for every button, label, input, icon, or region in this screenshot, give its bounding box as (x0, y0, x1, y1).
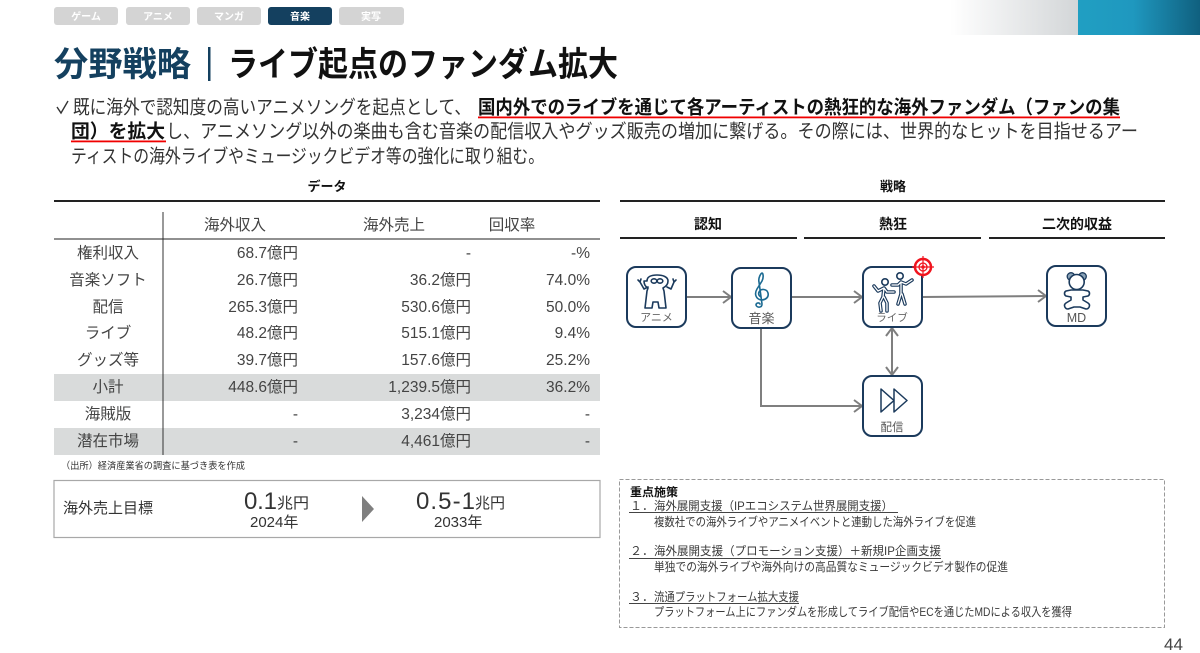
heading: strategy: 戦略 (880, 179, 906, 194)
data table: 海外収入 (204, 216, 266, 234)
header gradient band (950, 0, 1200, 35)
summary text: 団）を拡大 (71, 120, 165, 142)
data table: - (293, 406, 298, 423)
data table: 権利収入 (77, 244, 139, 262)
overseas sales target box: 0.5-1 (416, 488, 475, 515)
data table: 39.7億円 (237, 351, 298, 369)
data table: - (585, 406, 590, 423)
node: music (732, 268, 791, 328)
category tabs: マンガ (214, 10, 244, 23)
panel: key measures: 海外展開支援（IPエコシステム世界展開支援） (654, 499, 893, 513)
category tabs (54, 7, 404, 25)
summary text (57, 96, 1138, 168)
overseas sales target box: 2033年 (434, 514, 482, 531)
data table: 配信 (92, 298, 124, 316)
title (54, 45, 618, 84)
phase headings (620, 216, 1165, 239)
data table: 海賊版 (85, 405, 132, 423)
category tabs: ゲーム (71, 10, 101, 23)
node: music: 音楽 (748, 311, 775, 326)
node: live: ライブ (876, 311, 908, 324)
data table: 海外売上 (363, 216, 425, 234)
node: live (863, 267, 922, 327)
data table: - (293, 433, 298, 450)
node: anime: アニメ (640, 312, 673, 324)
phase headings: 認知 (694, 216, 722, 232)
data table: 音楽ソフト (69, 271, 147, 289)
phase headings: 熱狂 (879, 216, 907, 232)
summary text: ティストの海外ライブやミュージックビデオ等の強化に取り組む。 (71, 144, 544, 168)
data table (54, 212, 600, 455)
data table: グッズ等 (77, 351, 139, 369)
category tabs: アニメ (143, 11, 173, 23)
source note: （出所）経済産業省の調査に基づき表を作成 (61, 460, 245, 472)
overseas sales target box: 海外売上目標 (63, 500, 153, 517)
panel: key measures: プラットフォーム上にファンダムを形成してライブ配信やECを通じたMDによる収入を獲得 (654, 604, 1072, 619)
data table: 回収率 (489, 216, 535, 234)
panel: key measures: ２． (630, 544, 654, 558)
node: merchandise: MD (1067, 311, 1086, 325)
data table: 48.2億円 (237, 324, 298, 342)
heading: data: データ (307, 179, 347, 194)
data table: -% (571, 245, 590, 262)
flow arrows (686, 290, 1046, 412)
data table: 448.6億円 (228, 378, 298, 396)
title: 分野戦略 (54, 46, 191, 84)
overseas sales target box: 2024年 (250, 514, 298, 531)
title: ライブ起点のファンダム拡大 (228, 45, 618, 84)
phase headings: 二次的収益 (1042, 216, 1112, 232)
category tabs: 実写 (361, 10, 381, 23)
data table: 25.2% (546, 352, 590, 369)
data table: 157.6億円 (401, 351, 471, 369)
panel: key measures: 流通プラットフォーム拡大支援 (654, 590, 799, 604)
data table: 4,461億円 (401, 432, 471, 450)
data table: 26.7億円 (237, 271, 298, 289)
panel: key measures: １． (630, 499, 654, 513)
data table: 潜在市場 (77, 432, 139, 450)
node: distribution: 配信 (880, 420, 904, 434)
summary text: 国内外でのライブを通じて各アーティストの熱狂的な海外ファンダム（ファンの集 (478, 96, 1120, 118)
overseas sales target box: 0.1 (244, 488, 277, 515)
data table: 68.7億円 (237, 244, 298, 262)
panel: key measures (620, 480, 1164, 628)
data table: 265.3億円 (228, 298, 298, 316)
data table: 1,239.5億円 (388, 378, 471, 396)
data table: 530.6億円 (401, 298, 471, 316)
panel: key measures: 海外展開支援（プロモーション支援）＋新規IP企画支援 (654, 543, 941, 558)
icon: target marker (912, 256, 934, 278)
panel: key measures: 複数社での海外ライブやアニメイベントと連動した海外ライブを促進 (654, 514, 976, 529)
panel: key measures: 重点施策 (630, 485, 679, 499)
panel: key measures: 単独での海外ライブや海外向けの高品質なミュージックビデオ製作の促進 (654, 559, 1008, 574)
node: merchandise (1047, 266, 1106, 326)
overseas sales target box: 兆円 (277, 495, 309, 512)
data table: - (466, 245, 471, 262)
category tabs: 音楽 (290, 10, 310, 23)
data table: 9.4% (555, 325, 590, 342)
summary text: 既に海外で認知度の高いアニメソングを起点として、 (73, 96, 471, 118)
data table: 36.2億円 (410, 271, 471, 289)
data table: 74.0% (546, 272, 590, 289)
data table: 36.2% (546, 379, 590, 396)
data table: 50.0% (546, 299, 590, 316)
data table: 515.1億円 (401, 324, 471, 342)
panel: key measures: ３． (630, 590, 654, 604)
data table: 3,234億円 (401, 405, 471, 423)
overseas sales target box (54, 480, 600, 538)
node: anime (627, 267, 686, 327)
data table: - (585, 433, 590, 450)
data table: 小計 (92, 378, 124, 396)
data table: ライブ (85, 323, 131, 342)
overseas sales target box: 兆円 (475, 495, 505, 512)
node: distribution (863, 376, 922, 436)
